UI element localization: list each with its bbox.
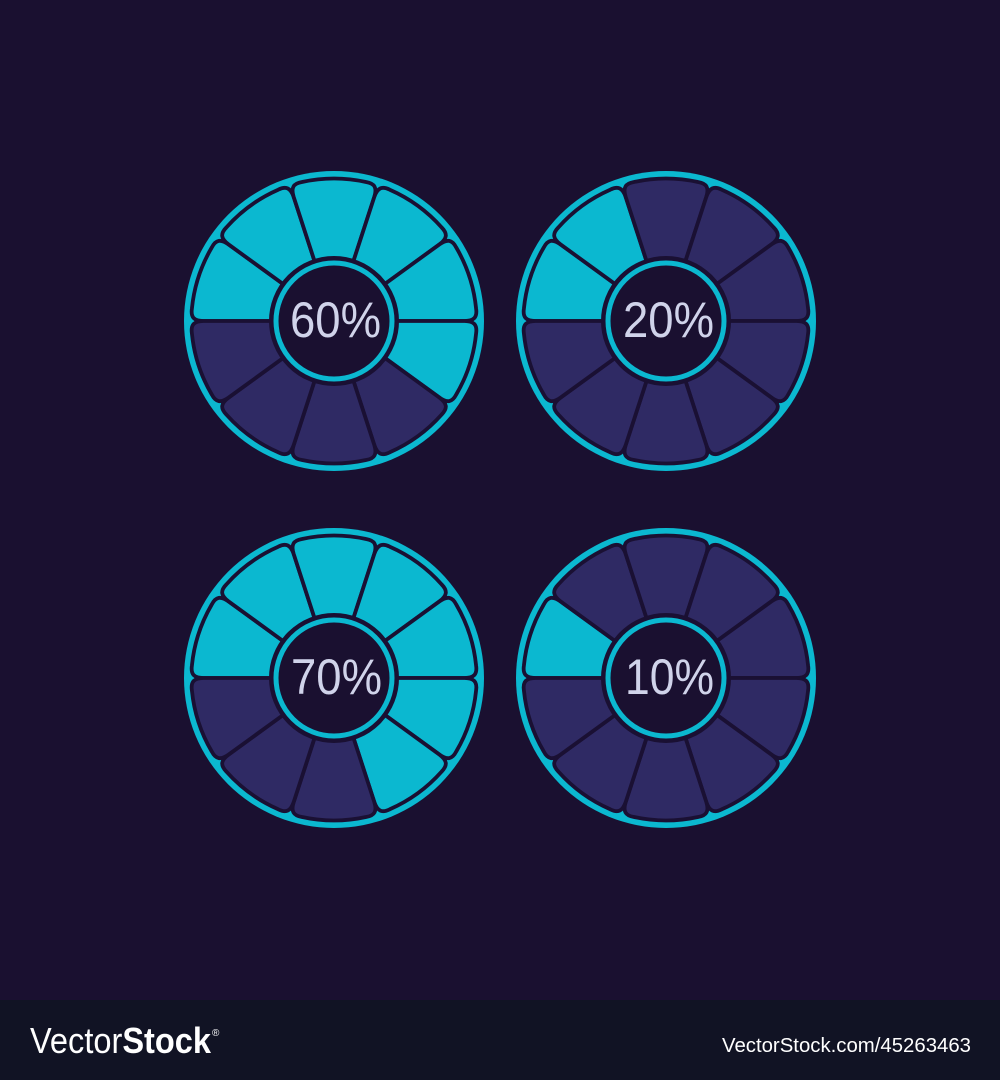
- outer ring: [184, 171, 484, 471]
- donut chart: 70%: [184, 528, 484, 828]
- center ring: [608, 263, 724, 379]
- empty segments: 4 of 10: [186, 300, 451, 464]
- center ring: [276, 620, 392, 736]
- center ring: [608, 620, 724, 736]
- registered mark: ®: [212, 1028, 220, 1039]
- value: 70%: 70%: [291, 649, 382, 705]
- value: 20%: 20%: [623, 292, 714, 348]
- center ring: [276, 263, 392, 379]
- empty segments: 9 of 10: [518, 536, 814, 820]
- footer band: [0, 1000, 1000, 1080]
- empty segments: 3 of 10: [186, 657, 375, 820]
- watermark url: VectorStock.com/45263463: [722, 1035, 971, 1057]
- center circle: [274, 261, 394, 381]
- value: 10%: 10%: [625, 649, 714, 705]
- filled segment: 1 of 10: [518, 595, 623, 699]
- center circle: [274, 618, 394, 738]
- empty segments: 8 of 10: [518, 178, 814, 464]
- footer background: [0, 1000, 1000, 1080]
- filled segments: 6 of 10: [186, 178, 482, 404]
- value: 60%: 60%: [290, 292, 381, 348]
- donut chart: 10%: [516, 528, 816, 828]
- donut chart: 60%: [184, 171, 484, 471]
- outer ring: [516, 171, 816, 471]
- filled segments: 7 of 10: [186, 536, 482, 818]
- watermark logo: VectorStock: [30, 1020, 212, 1061]
- filled segments: 2 of 10: [518, 181, 665, 342]
- outer ring: [184, 528, 484, 828]
- center circle: [606, 261, 726, 381]
- donut chart: 20%: [516, 171, 816, 471]
- center circle: [606, 618, 726, 738]
- outer ring: [516, 528, 816, 828]
